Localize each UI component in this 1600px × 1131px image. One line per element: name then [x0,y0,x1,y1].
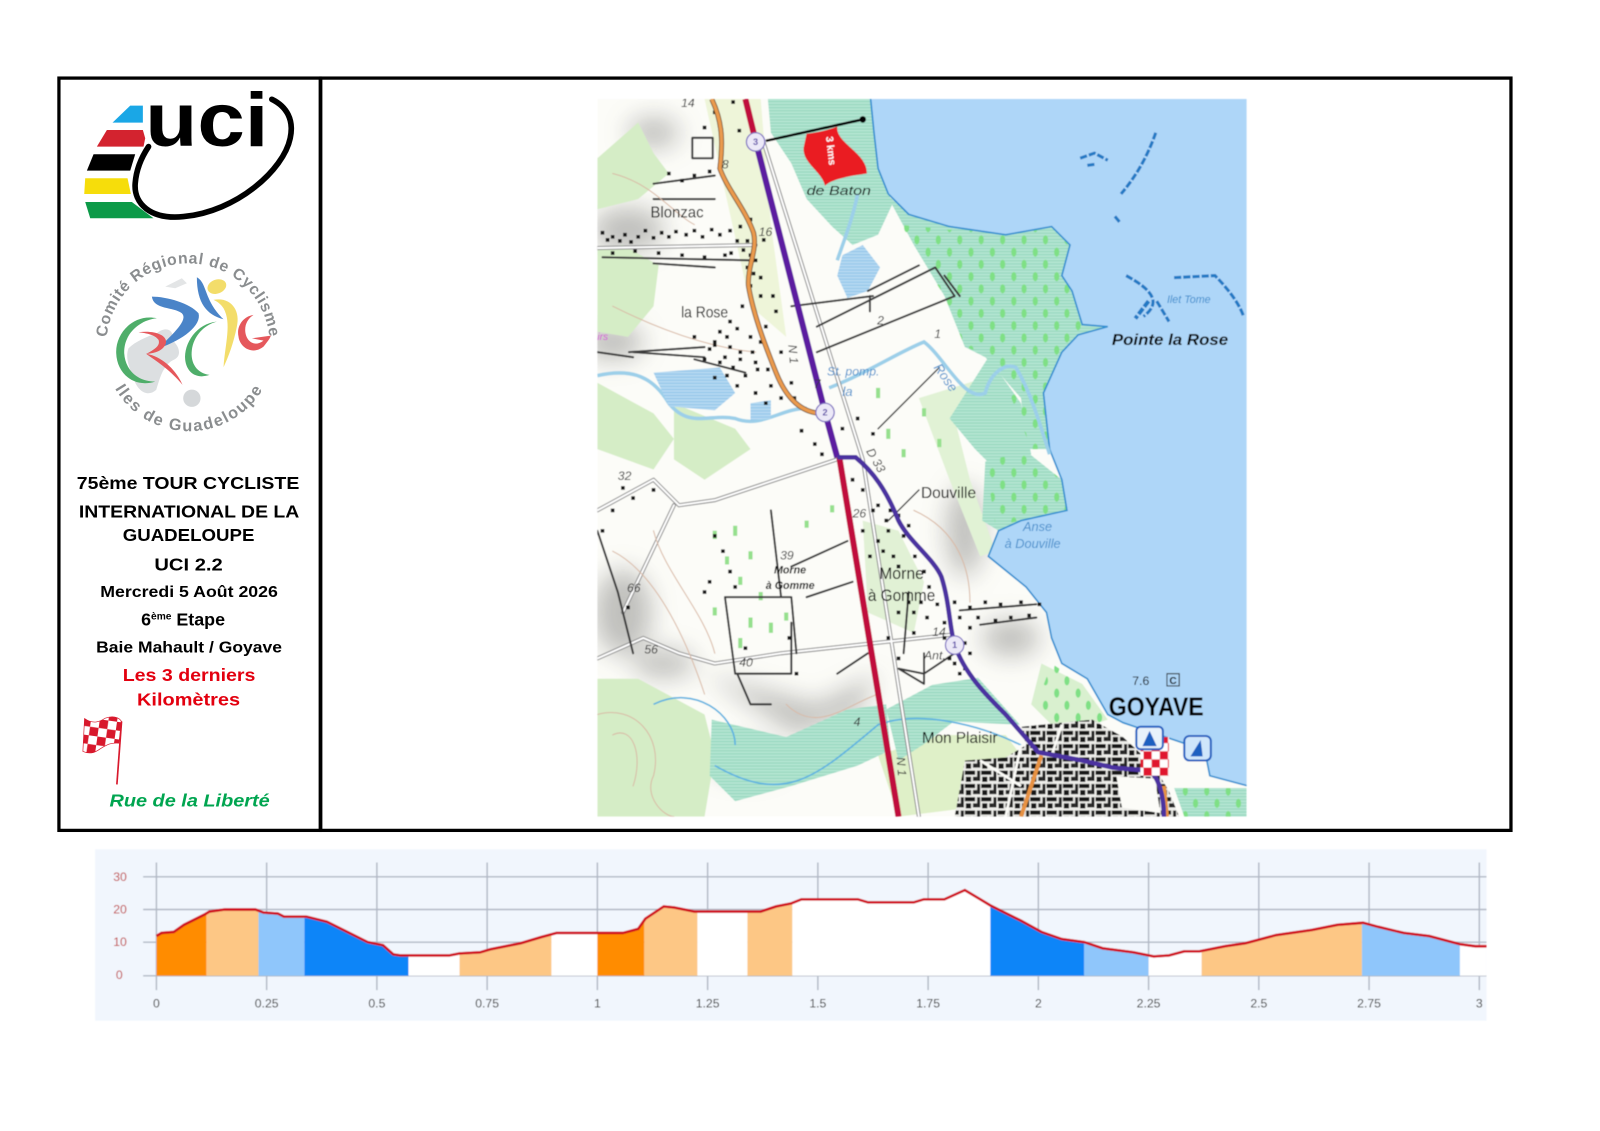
map labels: N 1 [785,344,801,364]
map labels: à Gomme [868,587,935,605]
map labels: Mon Plaisir [922,730,998,747]
kilometre markers: 1 [952,640,957,650]
finish street label: Rue de la Liberté [109,790,270,810]
elevation line [156,890,1486,956]
map labels: 32 [618,469,632,483]
islets [1080,133,1244,322]
elevation profile chart [95,849,1486,1021]
race title [77,473,299,545]
kilometre markers: 2 [822,407,828,417]
purple route [756,141,837,457]
contour lines [597,174,970,817]
stage: Etape [171,610,225,630]
race title: INTERNATIONAL DE LA [79,502,299,522]
pale green vegetation [597,99,1108,817]
map labels: la [842,384,853,399]
rivers and ponds [597,194,1050,784]
kilometre markers [746,133,964,654]
stage: ème [151,612,172,623]
map labels: 56 [644,642,658,656]
map labels: Blonzac [650,204,704,221]
map labels: D 33 [863,446,888,475]
x axis labels: 1.75 [916,996,940,1010]
map labels: 2 [876,314,884,328]
y axis labels: 10 [113,935,127,949]
map labels: C [1169,676,1177,687]
subtitle red [123,665,255,709]
route: Baie Mahault / Goyave [96,639,282,656]
land base [597,99,1247,817]
y axis labels: 20 [113,903,127,917]
map labels: 40 [739,656,753,670]
map labels: Douville [921,485,976,502]
stage: 6 [141,610,151,630]
x axis labels: 0.25 [255,996,279,1010]
town of Goyave [955,720,1179,817]
map labels: la Rose [681,304,728,321]
map labels: 66 [627,581,641,595]
race category: UCI 2.2 [154,555,223,575]
map labels: St. pomp. [827,365,879,379]
roads [597,138,1036,817]
hill shading [582,117,1039,776]
red route N1 [745,99,899,817]
text block: race information [77,473,299,709]
swoosh [135,99,291,217]
grid [143,863,1486,990]
map labels: Ant. [923,648,946,662]
x axis labels: 1.25 [696,996,720,1010]
map labels: à Gomme [766,580,815,592]
y axis labels: 0 [116,968,123,982]
x axis labels: 2.25 [1137,996,1161,1010]
ring text bottom: Iles de Guadeloupe [116,384,261,432]
map labels: 1 [934,327,941,341]
map labels: Ilet Tome [1167,294,1211,306]
finish marker and marina icons [1136,727,1211,776]
x axis labels: 1 [594,996,601,1010]
3 km flag [766,116,867,186]
map labels: N 1 [893,756,909,777]
3 km flag: 3 kms [823,136,837,166]
panel: map frame [321,78,1511,830]
race title: GUADELOUPE [123,525,254,545]
x axis labels: 2.5 [1250,996,1268,1010]
kilometre markers: 3 [753,137,758,147]
x axis labels: 2 [1035,996,1042,1010]
map labels: 16 [759,225,772,239]
map labels: 14 [681,96,695,110]
logo: Comité Régional de Cyclisme [96,252,278,432]
sea [870,92,1256,788]
map labels: Anse [1022,519,1052,534]
x axis labels: 0.75 [475,996,499,1010]
subtitle red: Kilomètres [137,689,240,709]
map labels: 7 [814,377,822,391]
x axis labels [153,996,1483,1010]
rainbow bands [84,106,154,218]
map labels: Pointe la Rose [1112,332,1228,349]
race title: 75ème TOUR CYCLISTE [77,473,299,493]
map labels: de Baton [807,183,871,198]
letters: uci [145,78,269,163]
map labels: Rose [931,361,961,395]
map labels: à Douville [1005,536,1061,551]
map labels: Morne [774,565,806,577]
x axis labels: 1.5 [809,996,827,1010]
logo: UCI [84,78,291,218]
y axis labels [113,870,127,982]
map labels: 8 [722,157,729,171]
map labels: 4 [854,715,861,729]
date: Mercredi 5 Août 2026 [100,584,278,601]
teal wetlands [710,99,1247,817]
x axis labels: 0.5 [368,996,386,1010]
x axis labels: 3 [1476,996,1483,1010]
map [582,92,1256,817]
map labels: 39 [780,548,794,562]
x axis labels: 2.75 [1357,996,1381,1010]
panel: left sidebar frame [59,78,320,830]
map labels [597,96,1228,777]
map labels: 14 [932,625,946,639]
logo shapes [116,277,271,407]
tracks [597,138,1036,704]
bright green vegetation marks [715,388,939,648]
ring text top: Comité Régional de Cyclisme [96,252,278,336]
orange road [712,99,825,413]
map labels: 26 [852,507,866,521]
x axis labels: 0 [153,996,160,1010]
icon: checkered flag [83,717,122,784]
gradient area segments [156,892,1487,976]
chart background [95,849,1486,1021]
y axis labels: 30 [113,870,127,884]
subtitle red: Les 3 derniers [123,665,255,685]
map labels: 7.6 [1132,674,1149,688]
map labels: GOYAVE [1109,694,1204,722]
buildings [602,102,1039,674]
map labels: Morne [879,565,924,583]
map labels: irs [597,332,608,343]
